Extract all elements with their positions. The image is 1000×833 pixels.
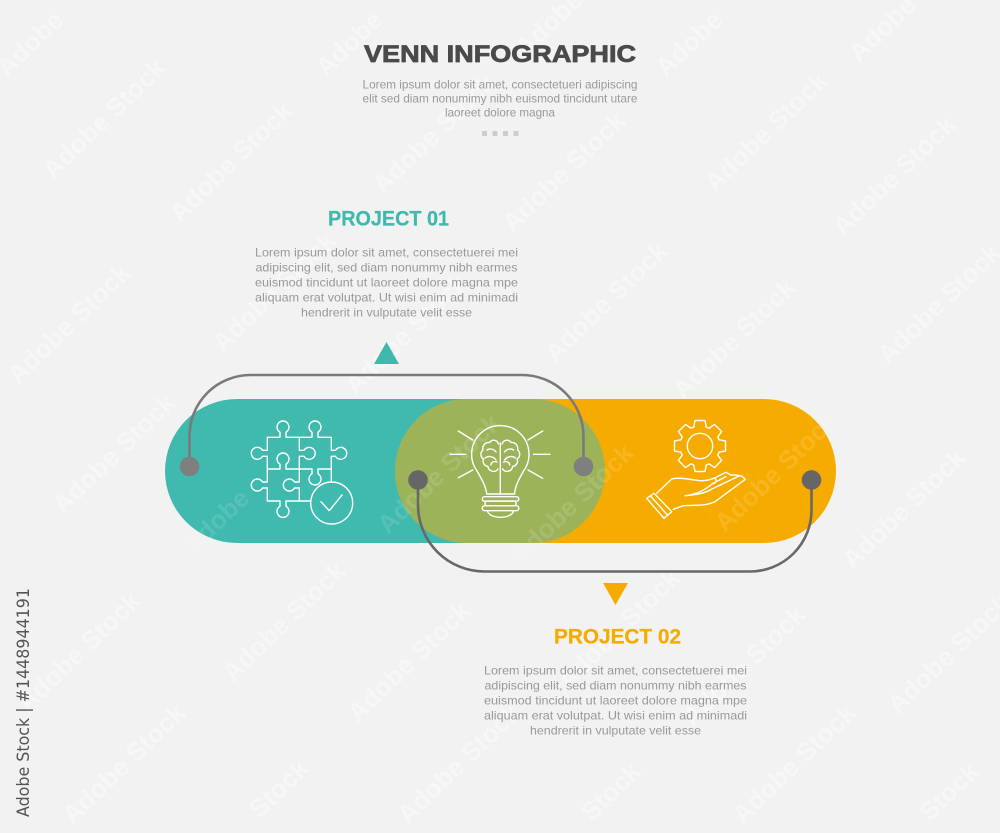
project 02 text (484, 664, 747, 738)
infographic canvas: Adobe Stock (496, 105, 632, 238)
infographic canvas: Adobe Stock (338, 267, 474, 400)
icon: puzzle with check (251, 421, 353, 524)
project 02 text: aliquam erat volutpat. Ut wisi enim ad minimadi (484, 708, 747, 722)
infographic canvas: Adobe Stock (206, 225, 342, 358)
infographic canvas: Adobe Stock (666, 272, 802, 405)
title divider dots (482, 131, 518, 136)
project 01 text (255, 246, 518, 320)
project 02 heading: PROJECT 02 (554, 625, 681, 649)
infographic canvas: Adobe (176, 483, 255, 560)
icon: gear over open hand (647, 420, 745, 518)
project 01 text: adipiscing elit, sed diam nonummy nibh earmes (256, 260, 518, 274)
infographic canvas: Adobe Stock (504, 437, 640, 570)
infographic canvas: Adobe Stock (836, 442, 972, 575)
infographic canvas: Adobe Stock (366, 67, 502, 200)
infographic canvas: Adobe Stock (341, 595, 477, 728)
infographic canvas: Adobe Stock (391, 697, 527, 830)
stock id sidebar: Adobe Stock | #1448944191 (14, 588, 34, 817)
connector: project 01 loop (180, 375, 593, 476)
venn: teal pill (165, 399, 605, 543)
infographic canvas: Adobe Stock (538, 235, 674, 368)
arrow: orange triangle down (603, 583, 628, 605)
infographic canvas: Adobe Stock (551, 562, 687, 695)
project 01 heading: PROJECT 01 (328, 207, 449, 231)
infographic canvas: Adobe Stock (676, 599, 812, 732)
subtitle text: elit sed diam nonumimy nibh euismod tincidunt utare (362, 92, 638, 106)
infographic canvas: Adobe Stock (163, 95, 299, 228)
project 01 text: aliquam erat volutpat. Ut wisi enim ad minimadi (255, 290, 518, 304)
subtitle text: Lorem ipsum dolor sit amet, consectetueri adipiscing (362, 78, 638, 92)
infographic canvas: Adobe (649, 5, 728, 82)
infographic canvas: Adobe (309, 5, 388, 82)
infographic canvas: Adobe Stock (698, 65, 834, 198)
infographic canvas: Adobe Stock (11, 585, 147, 718)
project 02 text: hendrerit in vulputate velit esse (530, 724, 701, 738)
icon: light bulb with brain (450, 426, 550, 517)
connector: project 02 loop (408, 470, 821, 572)
infographic canvas: Adobe Stock (726, 697, 862, 830)
project 02 text: euismod tincidunt ut laoreet dolore magna mpe (484, 694, 747, 708)
subtitle text: laoreet dolore magna (445, 106, 555, 120)
infographic canvas: Adobe Stock (1, 257, 137, 390)
title: VENN INFOGRAPHIC (364, 41, 636, 68)
subtitle text (362, 78, 638, 120)
project 02 text: adipiscing elit, sed diam nonummy nibh earmes (484, 678, 746, 692)
project 01 text: Lorem ipsum dolor sit amet, consectetuerei mei (255, 246, 518, 260)
infographic canvas: Adobe Stock (46, 387, 182, 520)
project 01 text: hendrerit in vulputate velit esse (301, 306, 472, 320)
project 01 text: euismod tincidunt ut laoreet dolore magna mpe (255, 276, 518, 290)
infographic canvas: Adobe Stock (826, 109, 962, 242)
infographic canvas: Adobe Stock (371, 407, 507, 540)
infographic canvas: Stock (913, 756, 985, 827)
infographic canvas: Stock (575, 756, 647, 827)
infographic canvas: Adobe Stock (708, 405, 844, 538)
venn: overlap (395, 399, 605, 543)
infographic canvas: Adobe Stock (56, 697, 192, 830)
infographic canvas: Stock (243, 753, 315, 824)
arrow: teal triangle up (374, 342, 399, 364)
project 02 text: Lorem ipsum dolor sit amet, consectetuerei mei (484, 664, 747, 678)
infographic canvas: Adobe Stock (216, 555, 352, 688)
infographic canvas: Adobe Stock (36, 52, 172, 185)
venn: orange pill (395, 399, 836, 543)
